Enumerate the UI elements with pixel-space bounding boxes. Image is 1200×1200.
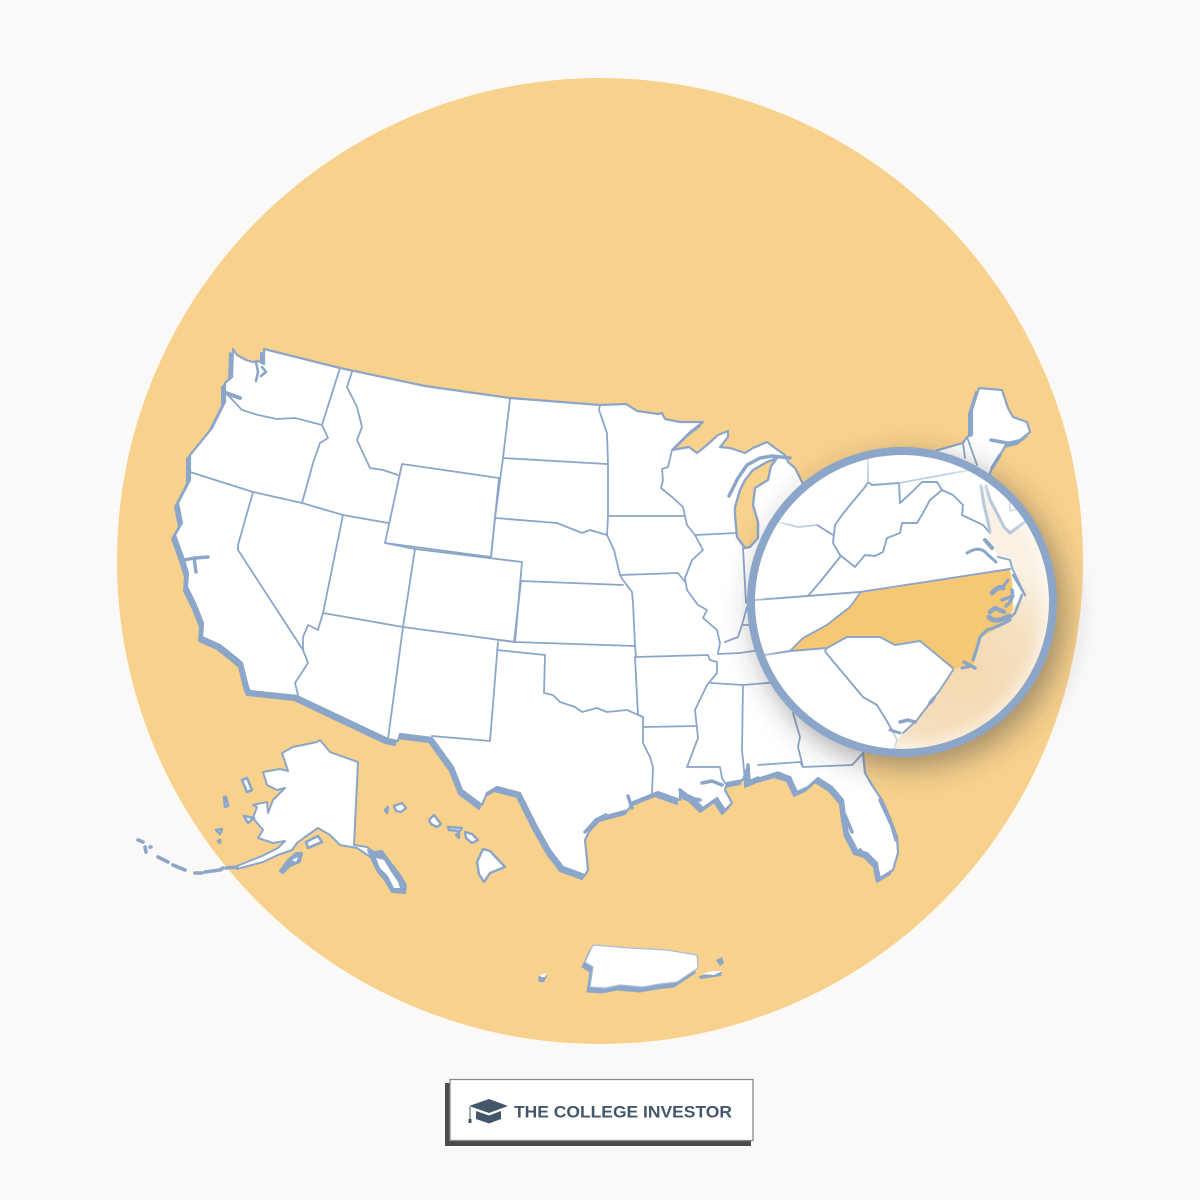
maui (465, 832, 478, 843)
lanai (456, 832, 459, 838)
gulf coast detail (585, 440, 1007, 866)
magnifier ring (751, 451, 1053, 753)
columbia river mouth (226, 393, 240, 398)
land mass (175, 349, 1030, 878)
magnifier shadow (755, 457, 1065, 767)
logo wordmark: THE COLLEGE INVESTOR (514, 1102, 732, 1122)
big island (477, 849, 505, 882)
culebra (716, 957, 724, 966)
niihau (385, 807, 388, 813)
kodiak island (280, 853, 302, 873)
icon: graduation cap (468, 1099, 508, 1124)
mona island (538, 974, 547, 982)
southeast alaska islands (368, 850, 406, 893)
molokai (448, 827, 462, 831)
logo shadow (445, 1083, 751, 1146)
puget sound (256, 362, 266, 381)
ocean (895, 487, 1049, 749)
state borders (190, 368, 977, 793)
alaska islands (216, 778, 322, 848)
alaska mainland (237, 740, 385, 869)
puerto rico shadow (582, 950, 695, 993)
puerto rico main island (585, 945, 698, 988)
land (755, 455, 1024, 749)
chesapeake bay shoreline (981, 486, 1030, 533)
san francisco bay (184, 557, 208, 572)
map: hawaii (385, 803, 505, 882)
green bay and upper peninsula shore (729, 456, 790, 496)
background circle (117, 78, 1083, 1044)
map: contiguous United States (172, 349, 1030, 882)
kauai (394, 803, 406, 812)
faded lines near lens edge (778, 458, 1030, 752)
oahu (429, 815, 441, 827)
logo panel (450, 1080, 753, 1140)
map: alaska (138, 740, 406, 893)
north carolina (790, 569, 1013, 670)
vieques (699, 972, 722, 979)
aleutian islands (138, 840, 237, 873)
lake michigan (735, 458, 777, 548)
bays and sounds (890, 540, 1025, 733)
magnifier: zoomed view of North Carolina (751, 451, 1060, 770)
logo badge (445, 1080, 753, 1146)
inner lens glow (755, 455, 1049, 749)
coastline shadow (172, 353, 1027, 882)
state lines inside magnifier (755, 482, 1025, 733)
map: puerto rico (538, 945, 724, 993)
magnifier contents (755, 455, 1049, 749)
